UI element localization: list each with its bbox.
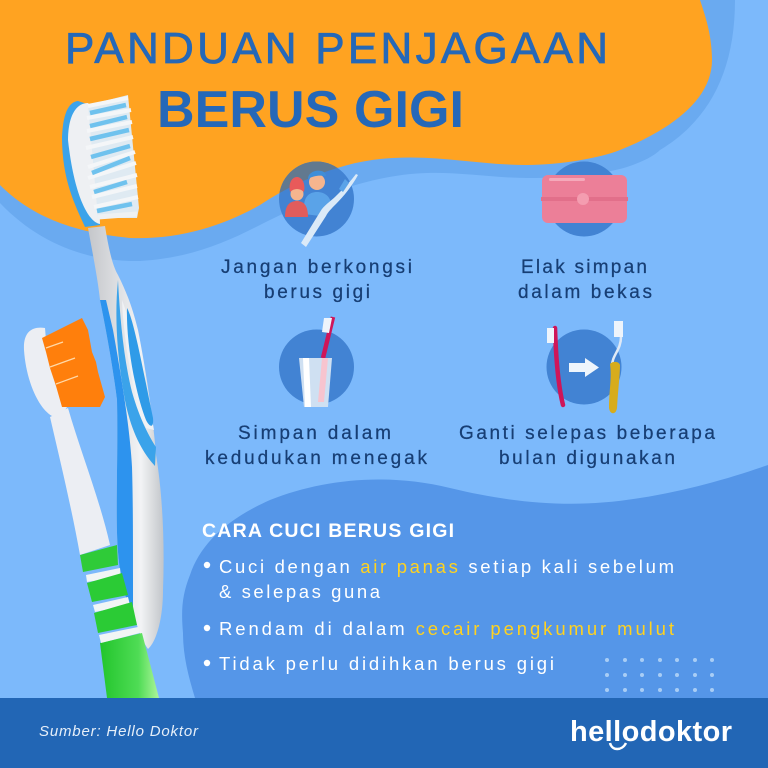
caption: replace: bulan digunakan bbox=[499, 448, 675, 469]
caption: store upright: Simpan dalam bbox=[238, 423, 391, 444]
head back bbox=[62, 101, 100, 227]
bristles bbox=[88, 95, 139, 218]
cleaning list: & selepas guna bbox=[219, 581, 381, 602]
handle white inset bbox=[122, 300, 154, 430]
caption: do not share bbox=[221, 257, 412, 303]
cleaning heading: CARA CUCI BERUS GIGI bbox=[202, 520, 454, 542]
logo: hellodoktor bbox=[570, 716, 732, 748]
caption: replace bbox=[459, 423, 715, 469]
caption: store upright: kedudukan menegak bbox=[205, 448, 428, 469]
cleaning list: Rendam di dalam cecair pengkumur mulut bbox=[219, 618, 674, 639]
head bbox=[24, 328, 68, 416]
caption: avoid container bbox=[518, 257, 652, 303]
cleaning list: Tidak perlu didihkan berus gigi bbox=[219, 653, 554, 674]
handle silhouette bbox=[88, 226, 164, 649]
orange bristles bbox=[42, 318, 105, 407]
lower blue panel bbox=[182, 465, 768, 698]
caption: store upright bbox=[205, 423, 428, 469]
orange header shape bbox=[0, 0, 712, 238]
icon: cup with toothbrush bbox=[279, 317, 354, 407]
caption: avoid container: Elak simpan bbox=[521, 257, 647, 278]
header wave shadow bbox=[0, 0, 735, 261]
cleaning list bbox=[204, 556, 674, 674]
caption: do not share: Jangan berkongsi bbox=[221, 257, 412, 278]
arrow bbox=[569, 358, 599, 377]
cleaning list: Cuci dengan air panas setiap kali sebelum bbox=[219, 556, 674, 577]
small green toothbrush bbox=[24, 318, 159, 698]
source note: Sumber: Hello Doktor bbox=[39, 723, 199, 740]
title: PANDUAN PENJAGAAN bbox=[65, 24, 608, 73]
neck bbox=[50, 408, 110, 555]
caption: avoid container: dalam bekas bbox=[518, 282, 652, 303]
caption: do not share: berus gigi bbox=[264, 282, 370, 303]
icon: family sharing toothbrush bbox=[279, 162, 358, 247]
footer bar bbox=[0, 698, 768, 768]
large blue toothbrush bbox=[62, 95, 164, 649]
title bbox=[65, 24, 608, 139]
icon: pink container bbox=[541, 162, 628, 236]
icon: replace toothbrush bbox=[546, 321, 623, 413]
green lower handle bbox=[100, 633, 159, 698]
blue back strip bbox=[100, 300, 133, 612]
title: BERUS GIGI bbox=[157, 81, 464, 139]
caption: replace: Ganti selepas beberapa bbox=[459, 423, 715, 444]
dot pattern bbox=[605, 658, 714, 692]
handle blue band bbox=[116, 280, 156, 466]
